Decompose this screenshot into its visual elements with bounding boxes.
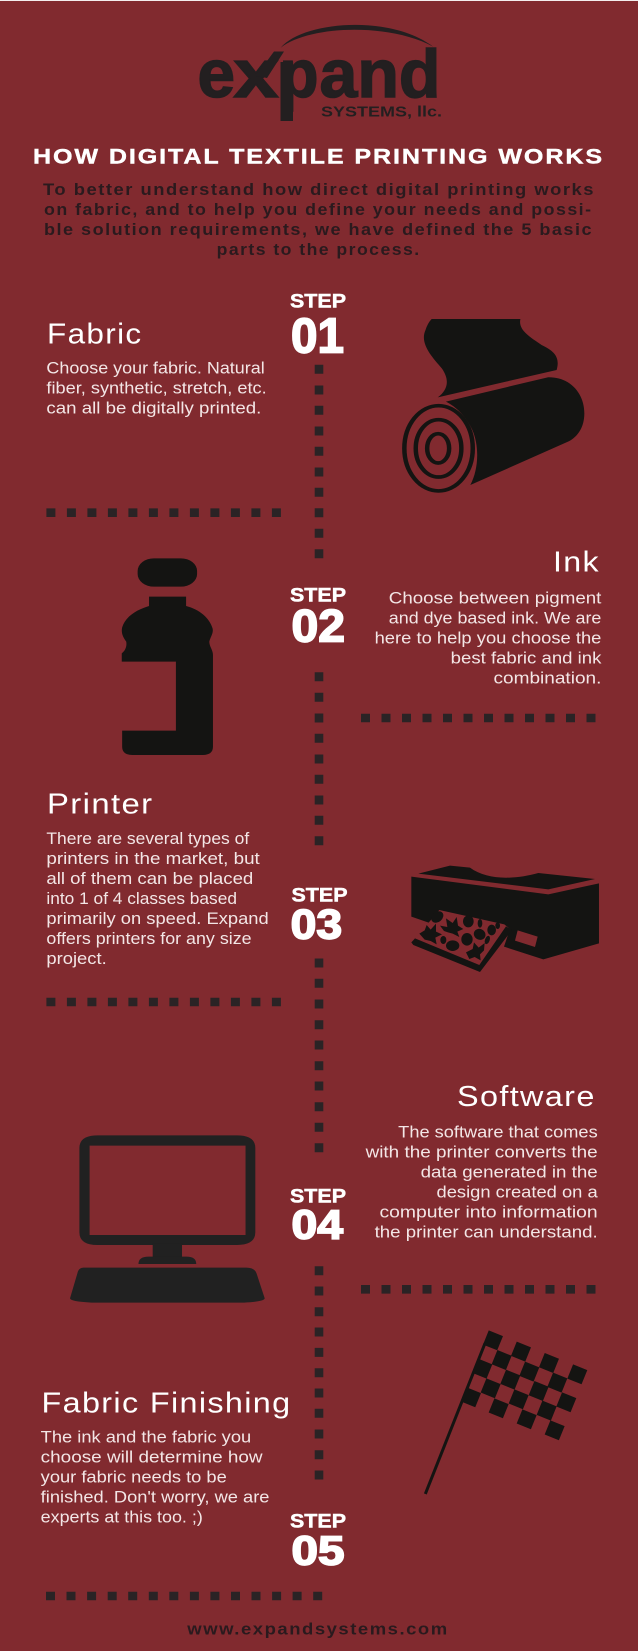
text: printer description: printers in the market, but xyxy=(46,850,260,868)
step 03 label xyxy=(291,885,348,947)
panel: step 2 ink xyxy=(122,547,602,755)
divider: finishing xyxy=(46,1592,322,1600)
text: software description: with the printer converts the xyxy=(364,1143,598,1161)
intro text block: parts to the process. xyxy=(217,240,421,259)
icon: checkered flag xyxy=(425,1330,587,1494)
text: ink description: here to help you choose the xyxy=(375,629,601,647)
heading: ink: Ink xyxy=(553,547,600,579)
icon: computer xyxy=(70,1135,265,1303)
text: finishing description: The ink and the fabric you xyxy=(41,1429,251,1447)
text: printer description: into 1 of 4 classes based xyxy=(46,890,237,908)
text: finishing description: finished. Don't worry, we are xyxy=(41,1489,270,1507)
text: ink description: Choose between pigment xyxy=(389,589,602,607)
title: HOW DIGITAL TEXTILE PRINTING WORKS xyxy=(33,145,604,168)
logo: expand systems: p xyxy=(280,36,318,112)
step 05 label xyxy=(290,1511,346,1573)
heading: printer: Printer xyxy=(47,788,154,820)
intro text block: To better understand how direct digital printing works xyxy=(43,180,595,199)
intro text block: on fabric, and to help you define your needs and possi- xyxy=(44,200,592,219)
text: finishing description xyxy=(41,1429,270,1527)
step 02 label xyxy=(290,585,346,652)
text: finishing description: experts at this too. ;) xyxy=(41,1509,203,1527)
text: ink description xyxy=(375,589,602,687)
step 02 label: 02 xyxy=(292,601,345,652)
text: printer description: project. xyxy=(46,950,107,968)
text: fabric description: can all be digitally printed. xyxy=(46,399,261,417)
text: ink description: combination. xyxy=(494,669,601,687)
paper sheet with leaf pattern xyxy=(419,909,500,960)
logo: expand systems: and xyxy=(320,36,440,112)
logo: expand systems xyxy=(198,25,442,121)
divider: printer xyxy=(46,998,281,1006)
step 03 label: STEP xyxy=(292,885,348,907)
intro text block xyxy=(43,180,595,259)
footer url: www.expandsystems.com xyxy=(186,1619,449,1638)
heading: fabric finishing: Fabric Finishing xyxy=(42,1388,292,1420)
heading: fabric: Fabric xyxy=(47,318,142,350)
text: printer description xyxy=(46,830,269,968)
icon: fabric roll xyxy=(404,319,584,491)
panel: step 1 fabric xyxy=(46,291,584,491)
step 02 label: STEP xyxy=(290,585,346,607)
divider: software xyxy=(361,1285,596,1294)
text: fabric description: fiber, synthetic, stretch, etc. xyxy=(46,379,267,397)
vertical dotted timeline xyxy=(315,365,323,1479)
text: finishing description: your fabric needs to be xyxy=(41,1469,227,1487)
icon: ink bottle xyxy=(122,558,213,755)
text: printer description: There are several types of xyxy=(46,830,250,848)
panel: step 4 software xyxy=(70,1081,599,1303)
text: finishing description: choose will determine how xyxy=(41,1449,263,1467)
step 04 label: STEP xyxy=(290,1186,346,1208)
logo: expand systems: x xyxy=(234,36,279,112)
text: printer description: all of them can be placed xyxy=(46,870,253,888)
step 05 label: STEP xyxy=(290,1511,346,1533)
text: software description: the printer can understand. xyxy=(375,1223,598,1241)
panel: step 3 printer xyxy=(46,788,599,972)
text: printer description: primarily on speed. Expand xyxy=(46,910,269,928)
icon: printer xyxy=(411,866,599,972)
intro text block: ble solution requirements, we have defined the 5 basic xyxy=(44,220,593,239)
text: printer description: offers printers for any size xyxy=(46,930,252,948)
text: ink description: and dye based ink. We are xyxy=(389,609,601,627)
step 04 label xyxy=(290,1186,346,1247)
printer slot xyxy=(515,930,538,947)
text: ink description: best fabric and ink xyxy=(451,649,602,667)
step 03 label: 03 xyxy=(291,900,342,947)
heading: software: Software xyxy=(457,1081,596,1113)
divider: fabric xyxy=(46,508,281,517)
step 04 label: 04 xyxy=(292,1201,343,1247)
logo: expand systems: e xyxy=(198,36,235,112)
text: fabric description xyxy=(46,359,267,417)
step 05 label: 05 xyxy=(292,1527,344,1573)
step 01 label: STEP xyxy=(290,291,346,313)
text: software description: computer into information xyxy=(380,1203,598,1221)
text: software description: The software that comes xyxy=(398,1123,598,1141)
text: software description: data generated in the xyxy=(421,1163,598,1181)
step 01 label: 01 xyxy=(291,309,344,363)
text: software description xyxy=(364,1123,599,1241)
text: software description: design created on a xyxy=(436,1183,599,1201)
logo: expand systems: SYSTEMS, llc. xyxy=(321,105,442,121)
text: fabric description: Choose your fabric. Natural xyxy=(46,359,265,377)
panel: step 5 fabric finishing xyxy=(41,1330,587,1573)
divider: ink xyxy=(361,714,596,722)
